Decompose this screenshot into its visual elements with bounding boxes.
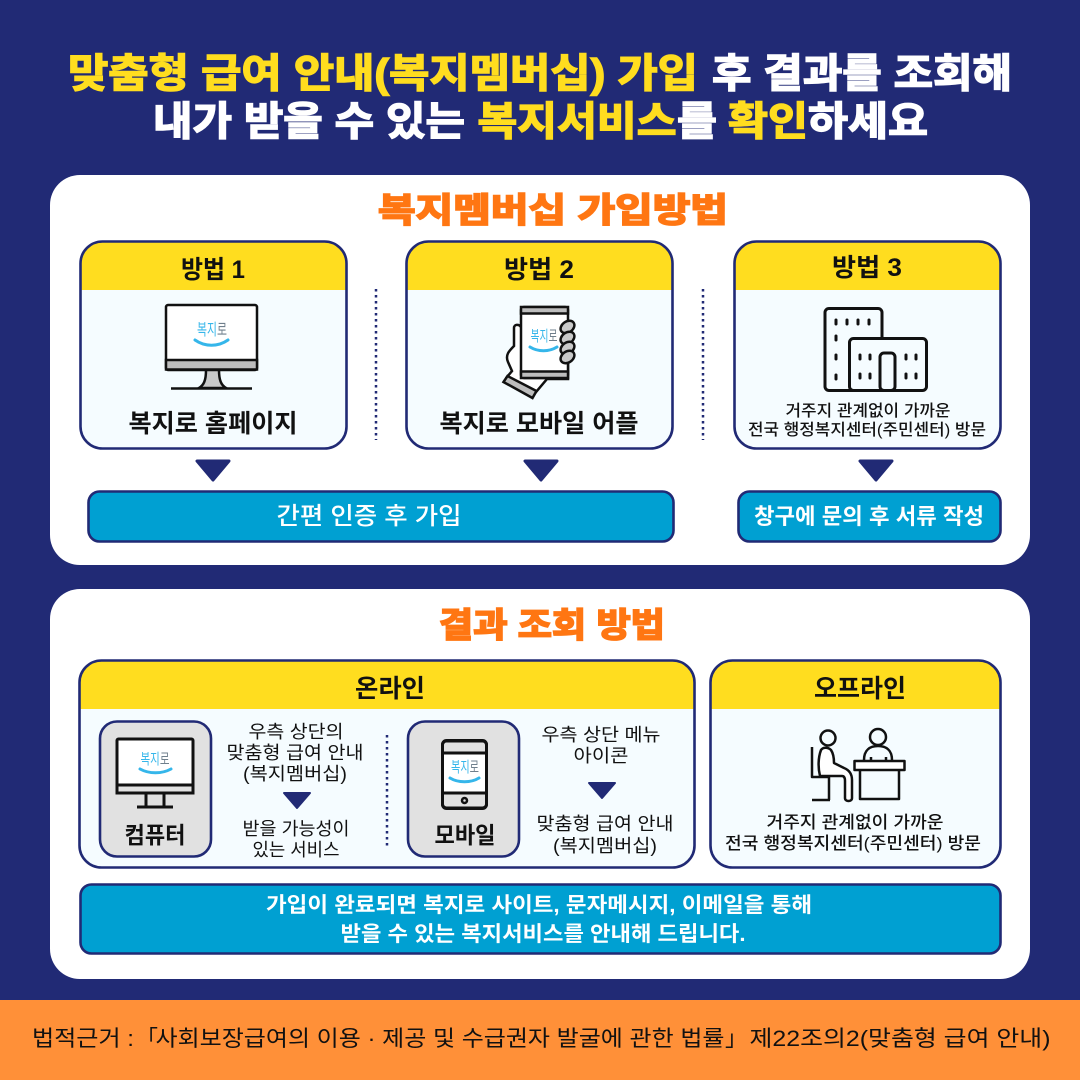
title: 맞춤형 급여 안내(복지멤버십) 가입	[68, 52, 698, 96]
arrow: computer steps	[284, 793, 310, 808]
panel: checking results	[50, 589, 1030, 979]
icon: computer: 복지로	[140, 751, 170, 768]
card: offline: 전국 행정복지센터(주민센터) 방문	[725, 834, 981, 853]
sub-card: mobile	[408, 722, 519, 856]
panel: sign-up methods	[50, 175, 1030, 565]
title: 확인	[728, 100, 808, 144]
sub-card: computer: 컴퓨터	[124, 822, 186, 848]
arrow: method 1	[197, 461, 229, 480]
card: method 1	[80, 242, 346, 448]
card: method 3: 방법 3	[832, 254, 902, 282]
bar: notification message: 가입이 완료되면 복지로 사이트, 문자메시지, 이메일을 통해	[266, 894, 812, 917]
text: mobile steps	[536, 725, 674, 856]
dotted divider left	[375, 289, 377, 440]
icon: hand holding phone	[504, 307, 577, 398]
card: offline: 오프라인	[814, 675, 906, 703]
footer: legal basis: 「	[136, 1026, 158, 1051]
sub-card: mobile: 모바일	[434, 822, 496, 848]
icon: desktop monitor	[166, 305, 257, 388]
sub-card: computer	[100, 722, 211, 856]
footer: legal basis: 」	[725, 1026, 747, 1051]
title: 후 결과를 조회해	[712, 52, 1012, 96]
text: computer steps	[226, 722, 364, 860]
card: method 1: 복지로 홈페이지	[128, 410, 298, 438]
title	[68, 52, 1012, 144]
text: mobile steps: 아이콘	[574, 746, 628, 766]
card: method 2: 복지로 모바일 어플	[440, 410, 638, 438]
text: computer steps: 우측 상단의	[248, 722, 344, 742]
title: 를	[677, 100, 717, 144]
icon: desktop monitor: 복지로	[197, 321, 227, 339]
text: computer steps: 있는 서비스	[252, 840, 340, 860]
title: 내가 받을 수 있는	[153, 100, 465, 144]
bar: window inquiry	[738, 492, 1000, 542]
footer: legal basis	[0, 1000, 1080, 1080]
dotted divider right	[702, 289, 704, 440]
title: 복지서비스	[478, 100, 676, 144]
text: computer steps: 받을 가능성이	[242, 819, 350, 839]
icon: consultation at desk	[812, 729, 904, 801]
footer: legal basis: 사회보장급여의 이용 · 제공 및 수급권자 발굴에 관한 법률	[156, 1026, 724, 1051]
bar: notification message	[80, 884, 1000, 954]
bar: simple authentication: 간편 인증 후 가입	[276, 503, 462, 530]
text: computer steps: 맞춤형 급여 안내	[226, 743, 364, 763]
card: method 3: 거주지 관계없이 가까운	[786, 402, 950, 420]
footer: legal basis: 법적근거 :	[32, 1026, 134, 1051]
heading: checking results: 결과 조회 방법	[439, 607, 665, 645]
text: computer steps: (복지멤버십)	[243, 764, 347, 784]
card: method 3	[734, 242, 1000, 448]
card: method 3: 전국 행정복지센터(주민센터) 방문	[748, 421, 986, 439]
bar: window inquiry: 창구에 문의 후 서류 작성	[754, 504, 984, 529]
text: mobile steps: 맞춤형 급여 안내	[536, 814, 674, 834]
icon: mobile phone: 복지로	[451, 759, 479, 776]
title: 하세요	[808, 100, 928, 144]
icon: hand holding phone: 복지로	[530, 328, 558, 345]
card: method 2: 방법 2	[504, 256, 574, 284]
text: mobile steps: 우측 상단 메뉴	[542, 725, 660, 745]
card: offline: 거주지 관계없이 가까운	[766, 813, 944, 832]
footer: legal basis: 제22조의2(맞춤형 급여 안내)	[750, 1026, 1050, 1051]
arrow: method 2	[525, 461, 557, 480]
bar: simple authentication	[88, 492, 674, 542]
card: online: 온라인	[355, 675, 425, 703]
card: online	[80, 660, 694, 868]
card: method 2	[406, 242, 672, 448]
icon: building	[825, 308, 926, 390]
bar: notification message: 받을 수 있는 복지서비스를 안내해 드립니다.	[340, 923, 746, 946]
arrow: method 3	[860, 461, 892, 480]
text: mobile steps: (복지멤버십)	[553, 836, 657, 856]
heading: sign-up methods: 복지멤버십 가입방법	[378, 192, 728, 230]
card: method 1: 방법 1	[181, 256, 245, 284]
arrow: mobile steps	[589, 783, 615, 798]
card: offline	[710, 660, 1001, 868]
dotted divider online	[386, 735, 388, 846]
